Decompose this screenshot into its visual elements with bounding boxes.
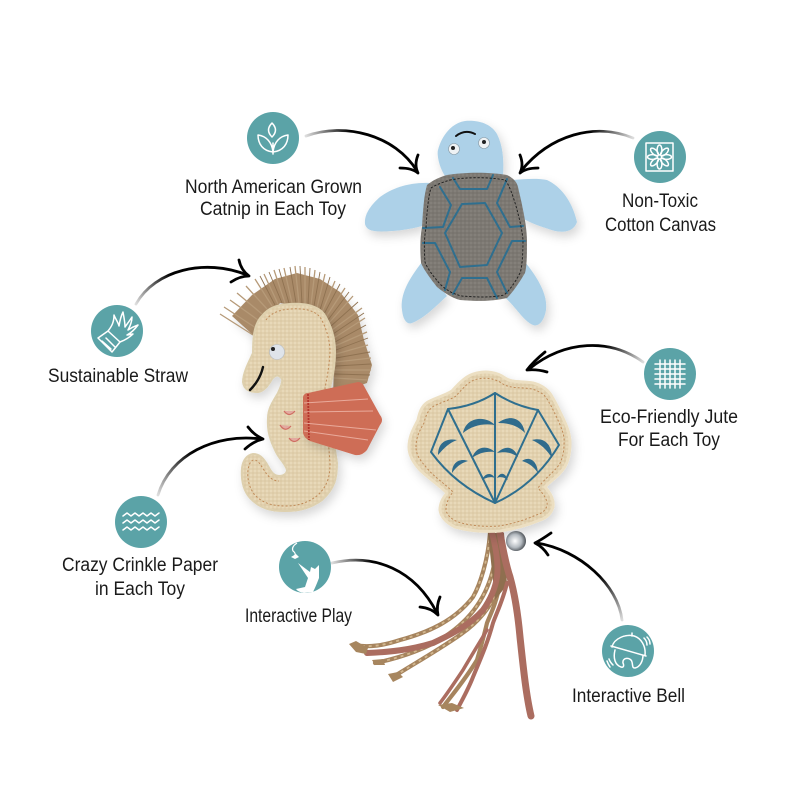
shell outer stitching [416,378,564,526]
callout: catnip [185,112,362,220]
label: jute: For Each Toy [618,430,720,451]
label: catnip: North American Grown [185,177,362,198]
turtle flippers and head [365,121,577,325]
seahorse face and gills [250,344,300,442]
icon: woven mesh [644,348,696,400]
label: crinkle paper: in Each Toy [95,579,185,600]
arrow: play to tassels [332,560,440,615]
turtle shell [420,173,527,301]
arrow: jute callout to shell [527,345,643,372]
turtle shell stitching [423,175,525,298]
toy: shell with tassels [349,372,570,716]
label: interactive play: Interactive Play [245,606,352,627]
icon: straw bundle [91,305,143,357]
arrow: crinkle paper to seahorse [158,427,263,495]
icon: waves [115,496,167,548]
bell [506,531,526,551]
turtle face [448,132,490,154]
toy: turtle [365,121,577,325]
callout: interactive bell [572,625,685,707]
icon: cat playing with toy [279,541,331,593]
label: interactive bell: Interactive Bell [572,686,685,707]
icon: sprout [247,112,299,164]
label: jute [600,407,738,451]
tassels [349,533,531,716]
shell embroidery [431,393,559,503]
label: crinkle paper [62,555,219,600]
label: cotton canvas [605,191,716,236]
label: straw: Sustainable Straw [48,366,188,387]
label: cotton canvas: Cotton Canvas [605,215,716,236]
icon: bell [602,625,654,677]
callout: straw [48,305,188,387]
icon: flower in square [634,131,686,183]
callout: crinkle paper [62,496,219,600]
label: crinkle paper: Crazy Crinkle Paper [62,555,219,576]
seahorse straw mane [220,266,372,395]
label: cotton canvas: Non-Toxic [622,191,698,212]
label: catnip: Catnip in Each Toy [200,199,346,220]
seahorse body [242,304,337,511]
arrow: bell callout to bell [535,533,622,620]
shell body [409,372,570,531]
callout: jute [600,348,738,451]
arrow: catnip to turtle [306,130,418,173]
toy: seahorse [220,266,382,511]
callout: cotton canvas [605,131,716,236]
label: jute: Eco-Friendly Jute [600,407,738,428]
label: catnip [185,177,362,220]
seahorse fin [303,382,382,455]
arrow: straw to seahorse [136,260,249,304]
callout: interactive play [245,541,352,627]
arrow: canvas to turtle [520,131,633,173]
